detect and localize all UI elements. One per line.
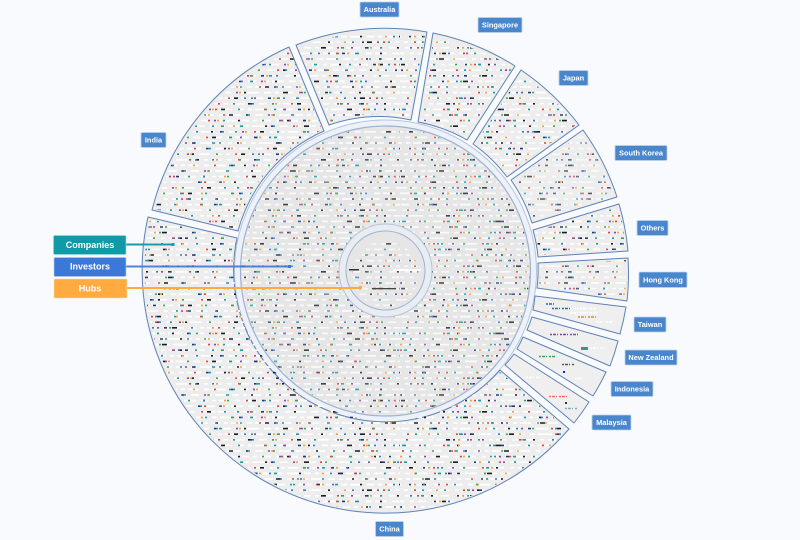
label: Singapore: Singapore [482, 20, 518, 30]
label: Hong Kong [639, 272, 687, 288]
label: Taiwan: Taiwan [638, 320, 663, 329]
panel: Indonesia [517, 337, 606, 396]
legend: Investors [54, 258, 291, 276]
panel: Japan [473, 70, 579, 177]
panel: inner circle hubs [339, 224, 432, 317]
label: South Korea: South Korea [619, 148, 664, 158]
label: Singapore [478, 18, 522, 32]
label: India: India [145, 136, 163, 144]
panel: Hong Kong [537, 258, 629, 301]
panel: China [142, 217, 569, 513]
label: China [376, 522, 404, 536]
label: Australia: Australia [364, 5, 396, 14]
label: India [141, 132, 166, 148]
label: Others [637, 220, 668, 236]
panel: Australia [296, 28, 427, 125]
legend: Hubs [54, 279, 362, 298]
label: Japan [559, 70, 588, 86]
label: Japan: Japan [563, 74, 585, 82]
label: Indonesia: Indonesia [615, 384, 650, 394]
panel: middle ring investors [234, 120, 536, 422]
label: New Zealand: New Zealand [628, 353, 674, 362]
label: Australia [360, 2, 399, 17]
panel: Malaysia [505, 354, 589, 423]
legend: Companies: Companies [66, 240, 114, 250]
legend: Investors: Investors [70, 262, 110, 272]
panel: Others [533, 204, 628, 257]
label: Malaysia [592, 415, 631, 430]
label: Indonesia [611, 382, 653, 396]
label: Hong Kong: Hong Kong [643, 275, 683, 284]
panel: Singapore [418, 33, 515, 140]
label: China: China [379, 524, 401, 534]
panel: South Korea [511, 130, 617, 223]
label: New Zealand [625, 350, 677, 365]
legend: Companies [54, 236, 174, 254]
panel: India [152, 47, 324, 231]
label: South Korea [615, 146, 667, 160]
label: Malaysia: Malaysia [596, 418, 628, 427]
panel: Taiwan [533, 296, 626, 334]
label: Others: Others [641, 224, 664, 232]
panel: New Zealand [527, 317, 618, 366]
legend: Hubs: Hubs [79, 284, 101, 294]
label: Taiwan [634, 317, 666, 332]
